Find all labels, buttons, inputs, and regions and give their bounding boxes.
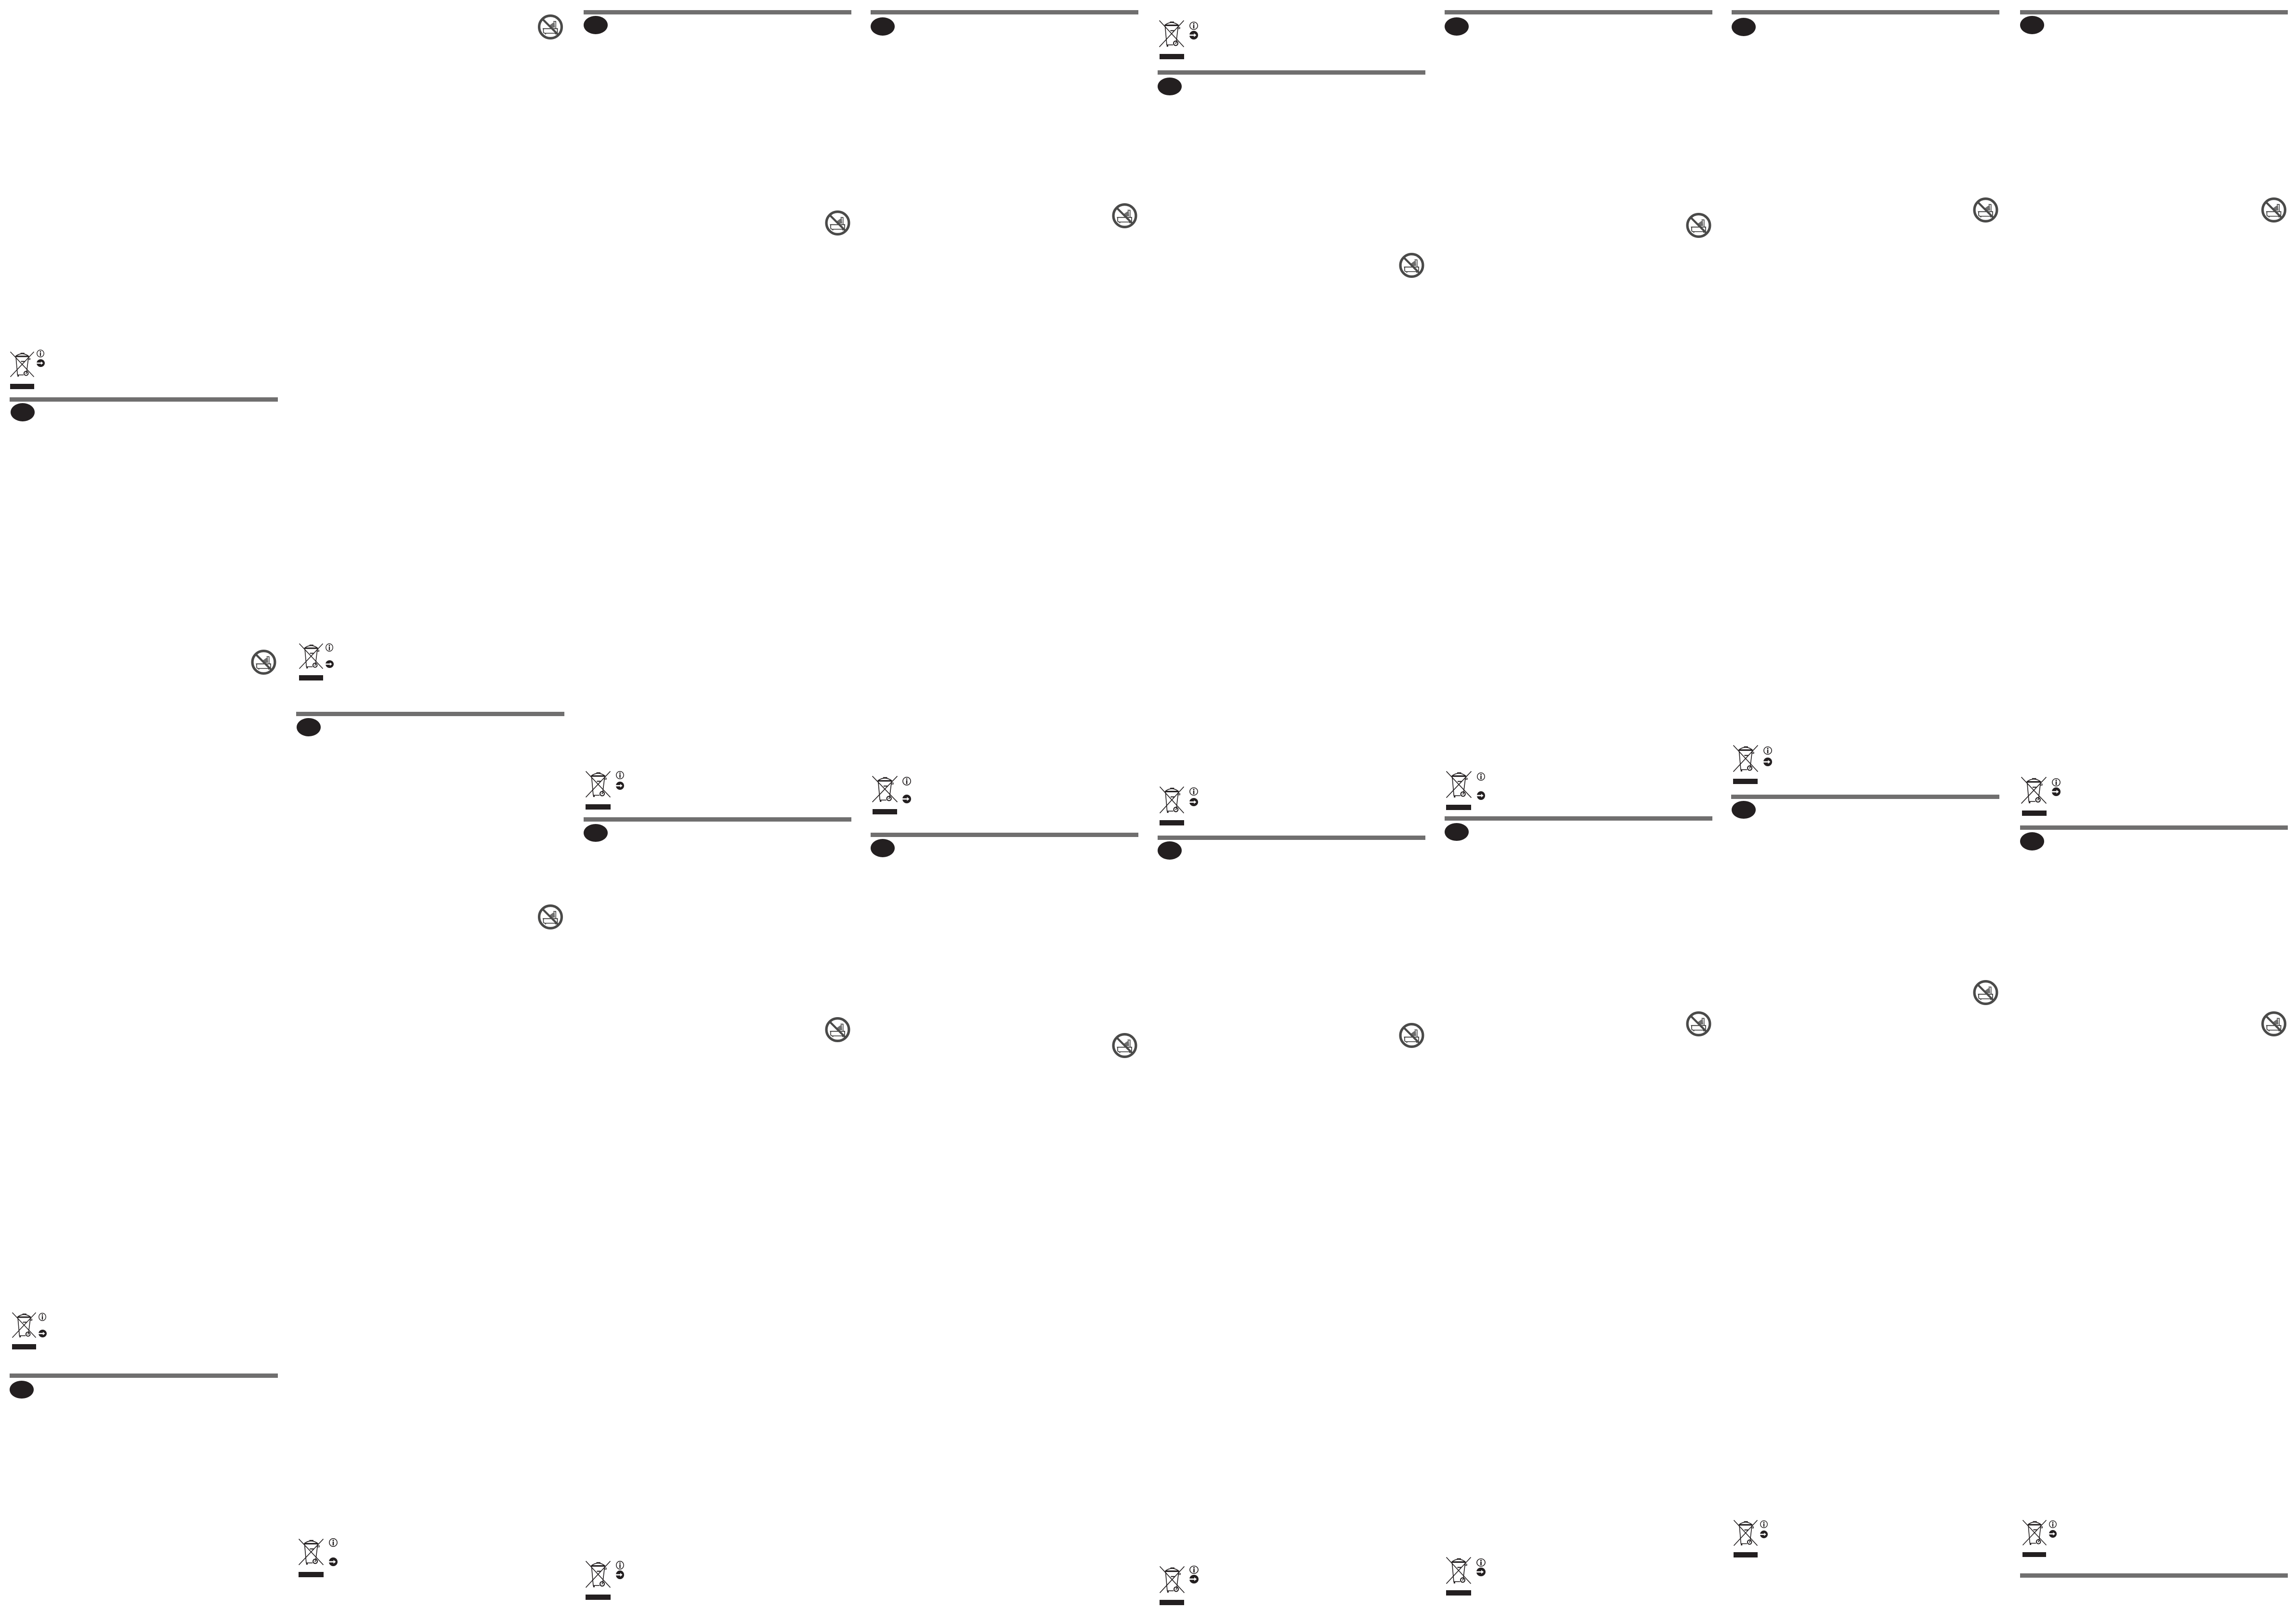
icon: black label bar <box>1734 1552 1758 1557</box>
black language badge <box>11 403 35 421</box>
black language badge <box>2020 16 2044 34</box>
icon: crossed-out bin <box>299 1539 323 1565</box>
column 5 lower section header <box>1158 836 1425 860</box>
icon: info <box>39 1313 46 1321</box>
icon: black label bar <box>1160 1600 1184 1605</box>
icon: no bath or shower, column 6 lower <box>1687 1013 1710 1035</box>
grey heading rule <box>10 397 278 402</box>
grey heading rule <box>2020 10 2288 14</box>
column 6 recycling symbols <box>1446 772 1485 810</box>
icon: black label bar <box>586 1595 611 1600</box>
icon: no bath or shower, column 2 top <box>539 16 561 38</box>
black language badge <box>584 824 608 842</box>
icon: no bath or shower, column 3 lower <box>826 1019 849 1041</box>
column 7 lower section header <box>1731 795 1999 819</box>
black language badge <box>1158 841 1182 860</box>
column 4 recycling symbols <box>873 776 911 814</box>
column 6 section header <box>1445 10 1712 36</box>
grey heading rule <box>584 10 851 14</box>
column 7 recycling symbols <box>1733 746 1772 784</box>
black language badge <box>10 1381 34 1399</box>
icon: no bath or shower, column 1 <box>252 651 275 673</box>
icon: arrow <box>1477 791 1485 800</box>
icon: info <box>1477 773 1485 780</box>
icon: no bath or shower, column 8 <box>2263 199 2285 221</box>
grey heading rule <box>1445 10 1712 14</box>
icon: black label bar <box>1160 54 1184 59</box>
icon: black label bar <box>10 384 34 389</box>
black language badge <box>2020 832 2044 850</box>
grey heading rule <box>10 1373 278 1378</box>
icon: crossed-out bin <box>586 1561 610 1587</box>
black language badge <box>1732 801 1756 819</box>
icon: no bath or shower, column 3 <box>826 212 849 234</box>
icon: info <box>2052 779 2060 786</box>
column 3 bottom recycling symbols <box>586 1561 624 1600</box>
icon: arrow <box>1476 1568 1486 1576</box>
column 6 bottom recycling symbols <box>1446 1557 1486 1596</box>
icon: crossed-out bin <box>300 643 323 668</box>
black language badge <box>584 16 608 34</box>
black language badge <box>871 839 895 857</box>
column 3 recycling symbols <box>586 772 624 810</box>
icon: black label bar <box>1446 805 1471 810</box>
icon: black label bar <box>12 1344 36 1349</box>
icon: no bath or shower, column 8 lower <box>2263 1013 2285 1035</box>
icon: no bath or shower, column 5 lower <box>1400 1024 1423 1046</box>
column 8 bottom grey rule <box>2020 1573 2288 1578</box>
icon: arrow <box>1189 1575 1199 1583</box>
icon: crossed-out bin <box>1160 21 1184 47</box>
column 5 recycling symbols <box>1160 787 1198 825</box>
icon: arrow <box>1189 31 1198 39</box>
icon: black label bar <box>299 675 323 680</box>
icon: info <box>616 772 624 779</box>
icon: info <box>329 1539 337 1546</box>
grey heading rule <box>2020 825 2288 830</box>
icon: crossed-out bin <box>873 776 897 802</box>
black language badge <box>1732 18 1756 36</box>
icon: arrow <box>2049 1530 2057 1538</box>
icon: black label bar <box>1160 820 1184 825</box>
icon: no bath or shower, column 2 lower <box>539 906 561 928</box>
black language badge <box>297 718 321 736</box>
icon: info <box>1190 788 1198 795</box>
grey heading rule <box>1445 816 1712 821</box>
icon: arrow <box>616 1570 624 1579</box>
column 2 bottom recycling symbols <box>299 1539 338 1577</box>
icon: black label bar <box>873 809 897 814</box>
column 8 recycling symbols <box>2022 777 2061 816</box>
column 7 bottom recycling symbols <box>1734 1520 1768 1557</box>
column 5 bottom recycling symbols <box>1160 1566 1199 1605</box>
icon: arrow <box>37 359 45 367</box>
grey heading rule <box>1732 10 1999 14</box>
grey heading rule <box>1731 795 1999 799</box>
icon: arrow <box>616 782 624 790</box>
column 3 lower section header <box>584 817 851 842</box>
black language badge <box>1445 17 1469 36</box>
icon: arrow <box>326 660 334 668</box>
column 1 lower section header <box>10 1373 278 1399</box>
icon: no bath or shower, column 7 lower <box>1974 981 1997 1004</box>
icon: crossed-out bin <box>1447 772 1471 798</box>
column 5 top recycling symbols <box>1160 21 1198 59</box>
column 1 section header <box>10 397 278 421</box>
grey heading rule <box>584 817 851 822</box>
icon: arrow <box>329 1557 338 1566</box>
column 2 recycling symbols <box>299 643 334 680</box>
icon: black label bar <box>1733 779 1758 784</box>
icon: no bath or shower, column 7 <box>1974 199 1997 221</box>
column 8 section header <box>2020 10 2288 34</box>
icon: info <box>37 350 44 357</box>
icon: arrow <box>1189 798 1198 806</box>
grey heading rule <box>1158 836 1425 840</box>
icon: arrow <box>902 795 911 803</box>
black language badge <box>1445 823 1469 841</box>
column 1 lower recycling symbols <box>12 1313 47 1349</box>
icon: no bath or shower, column 4 lower <box>1113 1034 1136 1057</box>
icon: no bath or shower, column 5 <box>1400 254 1423 276</box>
column 4 lower section header <box>871 833 1138 857</box>
icon: no bath or shower, column 6 <box>1687 214 1710 236</box>
icon: crossed-out bin <box>1160 1567 1184 1593</box>
column 8 lower section header <box>2020 825 2288 850</box>
icon: crossed-out bin <box>1160 787 1184 813</box>
icon: info <box>1764 747 1772 754</box>
column 1 recycling symbols <box>10 350 45 389</box>
column 3 section header <box>584 10 851 34</box>
icon: crossed-out bin <box>1447 1557 1471 1583</box>
column 6 lower section header <box>1445 816 1712 841</box>
icon: arrow <box>39 1330 47 1337</box>
grey heading rule <box>296 712 564 716</box>
icon: info <box>1190 1566 1198 1573</box>
icon: black label bar <box>299 1572 324 1577</box>
icon: info <box>1190 22 1198 29</box>
icon: crossed-out bin <box>586 772 610 797</box>
icon: arrow <box>1763 758 1772 766</box>
black language badge <box>1158 78 1182 95</box>
icon: black label bar <box>1446 1590 1471 1596</box>
icon: black label bar <box>2022 811 2047 816</box>
icon: crossed-out bin <box>11 352 34 377</box>
column 4 section header <box>871 10 1138 36</box>
icon: crossed-out bin <box>1734 1520 1758 1545</box>
icon: info <box>1761 1521 1767 1528</box>
black language badge <box>871 17 895 36</box>
icon: info <box>903 777 911 785</box>
column 2 section header <box>296 712 564 736</box>
icon: info <box>326 644 333 651</box>
icon: info <box>2049 1521 2056 1528</box>
icon: crossed-out bin <box>1734 746 1758 772</box>
column 7 section header <box>1732 10 1999 36</box>
icon: black label bar <box>586 804 611 810</box>
icon: info <box>616 1561 624 1569</box>
icon: crossed-out bin <box>2022 1520 2047 1545</box>
column 5 section header <box>1158 70 1425 95</box>
icon: no bath or shower, column 4 <box>1113 205 1136 227</box>
icon: crossed-out bin <box>2022 777 2046 803</box>
icon: arrow <box>2052 787 2061 796</box>
icon: black label bar <box>2022 1552 2046 1557</box>
grey heading rule <box>871 10 1138 14</box>
column 8 bottom recycling symbols <box>2022 1520 2057 1557</box>
icon: arrow <box>1760 1530 1768 1538</box>
icon: info <box>1477 1559 1485 1566</box>
grey heading rule <box>1158 70 1425 75</box>
icon: crossed-out bin <box>13 1313 36 1338</box>
grey heading rule <box>871 833 1138 837</box>
